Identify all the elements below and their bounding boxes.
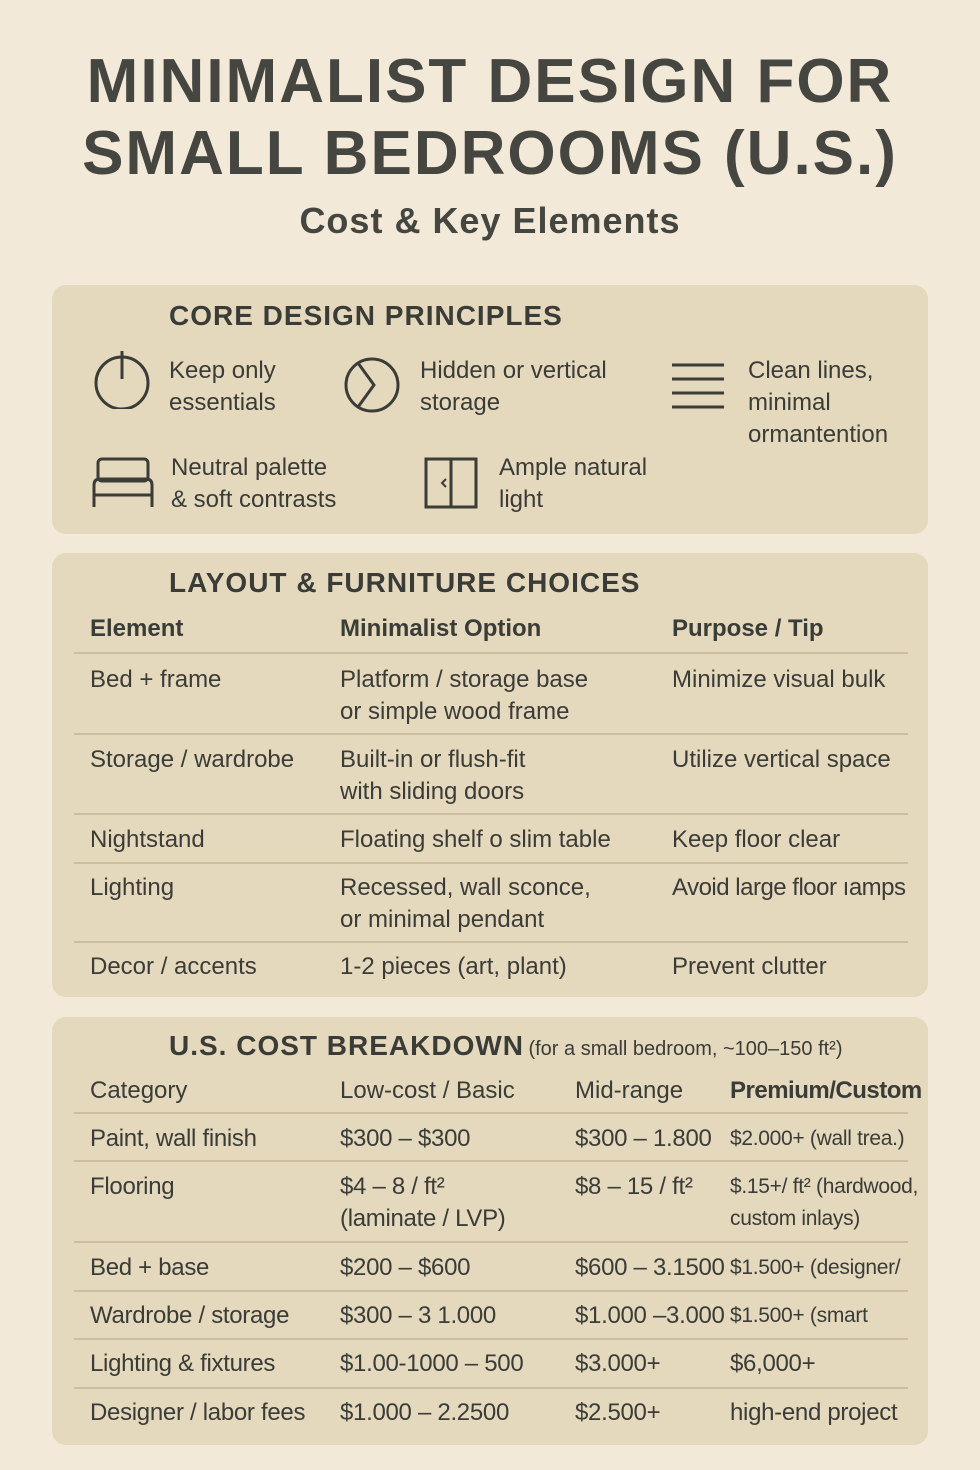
layout table rows: Decor / accents bbox=[90, 953, 257, 980]
layout table rows: Built-in or flush-fit bbox=[340, 746, 525, 773]
cost table rows: $1.000 –3.000 bbox=[575, 1302, 725, 1329]
heading: layout: LAYOUT & FURNITURE CHOICES bbox=[169, 567, 640, 598]
table header: Element bbox=[90, 615, 183, 642]
layout table rows: 1-2 pieces (art, plant) bbox=[340, 953, 567, 980]
title bbox=[82, 47, 898, 188]
cost table rows: $1.00-1000 – 500 bbox=[340, 1350, 523, 1377]
text: clean lines bbox=[748, 357, 888, 448]
panel: core design principles bbox=[52, 285, 928, 534]
cost table rows: $4 – 8 / ft² bbox=[340, 1173, 444, 1200]
table header bbox=[90, 615, 824, 642]
text: hidden storage bbox=[420, 357, 607, 416]
cost table header: Category bbox=[90, 1077, 187, 1104]
text: hidden storage: Hidden or vertical bbox=[420, 357, 607, 384]
text: clean lines: minimal bbox=[748, 389, 831, 416]
cost table rows: $300 – 1.800 bbox=[575, 1125, 712, 1152]
panel: layout & furniture bbox=[52, 553, 928, 997]
layout table rows: Floating shelf o slim table bbox=[340, 826, 611, 853]
text: clean lines: Clean lines, bbox=[748, 357, 873, 384]
layout table rows: Nightstand bbox=[90, 826, 205, 853]
text: keep only essentials bbox=[169, 357, 276, 416]
text: natural light: light bbox=[499, 486, 543, 513]
panel: cost breakdown bbox=[52, 1017, 928, 1445]
cost table rows: $3.000+ bbox=[575, 1350, 660, 1377]
table header: Minimalist Option bbox=[340, 615, 541, 642]
cost table rows: $300 – $300 bbox=[340, 1125, 470, 1152]
layout table rows: Prevent clutter bbox=[672, 953, 827, 980]
cost table rows: Lighting & fixtures bbox=[90, 1350, 275, 1377]
icon: power bbox=[94, 351, 150, 409]
layout table rows: with sliding doors bbox=[340, 778, 524, 805]
icon: window door bbox=[424, 458, 478, 508]
text: keep only essentials: essentials bbox=[169, 389, 276, 416]
cost table rows: $300 – 3 1.000 bbox=[340, 1302, 496, 1329]
cost table rows: $2.500+ bbox=[575, 1399, 660, 1426]
cost table header bbox=[90, 1077, 922, 1104]
layout table rows: Avoid large floor ıamps bbox=[672, 874, 906, 901]
cost table rows bbox=[90, 1125, 918, 1426]
layout table rows: Platform / storage base bbox=[340, 666, 588, 693]
cost table rows: (laminate / LVP) bbox=[340, 1205, 506, 1232]
cost table rows: Wardrobe / storage bbox=[90, 1302, 289, 1329]
cost table rows: Flooring bbox=[90, 1173, 174, 1200]
heading: cost breakdown: U.S. COST BREAKDOWN (for a small bedroom, ~100–150 ft²) bbox=[169, 1030, 842, 1061]
cost table rows: $.15+/ ft² (hardwood, bbox=[730, 1175, 918, 1198]
layout table rows bbox=[90, 666, 906, 980]
text: neutral palette bbox=[171, 454, 336, 513]
cost table rows: high-end project bbox=[730, 1399, 897, 1426]
text: hidden storage: storage bbox=[420, 389, 500, 416]
cost table rows: Bed + base bbox=[90, 1254, 209, 1281]
cost table rows: $1.500+ (smart bbox=[730, 1304, 868, 1327]
text: natural light bbox=[499, 454, 647, 513]
layout table rows: Minimize visual bulk bbox=[672, 666, 885, 693]
cost table header: Mid-range bbox=[575, 1077, 683, 1104]
cost table rows: custom inlays) bbox=[730, 1207, 860, 1230]
text: neutral palette: Neutral palette bbox=[171, 454, 327, 481]
cost table rows: $1.500+ (designer/ bbox=[730, 1256, 900, 1279]
table header: Purpose / Tip bbox=[672, 615, 824, 642]
cost table header: Low-cost / Basic bbox=[340, 1077, 515, 1104]
icon: circle chevron bbox=[344, 358, 400, 412]
icon: lines bbox=[672, 364, 724, 408]
cost table rows: $200 – $600 bbox=[340, 1254, 470, 1281]
text: neutral palette: & soft contrasts bbox=[171, 486, 336, 513]
layout table rows: Keep floor clear bbox=[672, 826, 840, 853]
text: natural light: Ample natural bbox=[499, 454, 647, 481]
title: MINIMALIST DESIGN FOR bbox=[87, 47, 893, 116]
layout table rows: Utilize vertical space bbox=[672, 746, 891, 773]
cost table rows: $6,000+ bbox=[730, 1350, 815, 1377]
text: keep only essentials: Keep only bbox=[169, 357, 276, 384]
heading: core design principles: CORE DESIGN PRINCIPLES bbox=[169, 300, 563, 331]
cost table header: Premium/Custom bbox=[730, 1077, 922, 1104]
cost table rows: $1.000 – 2.2500 bbox=[340, 1399, 509, 1426]
layout table rows: Bed + frame bbox=[90, 666, 221, 693]
cost table rows: Designer / labor fees bbox=[90, 1399, 305, 1426]
layout table rows: Storage / wardrobe bbox=[90, 746, 294, 773]
cost table rows: $2.000+ (wall trea.) bbox=[730, 1127, 904, 1150]
layout table rows: Lighting bbox=[90, 874, 174, 901]
cost table rows: $8 – 15 / ft² bbox=[575, 1173, 693, 1200]
cost table rows: Paint, wall finish bbox=[90, 1125, 257, 1152]
subtitle: Cost & Key Elements bbox=[299, 200, 681, 241]
layout table rows: or simple wood frame bbox=[340, 698, 569, 725]
layout table rows: Recessed, wall sconce, bbox=[340, 874, 591, 901]
layout table rows: or minimal pendant bbox=[340, 906, 544, 933]
text: clean lines: ormantention bbox=[748, 421, 888, 448]
cost table rows: $600 – 3.1500 bbox=[575, 1254, 725, 1281]
icon: bed bbox=[92, 458, 154, 507]
title: SMALL BEDROOMS (U.S.) bbox=[82, 119, 898, 188]
